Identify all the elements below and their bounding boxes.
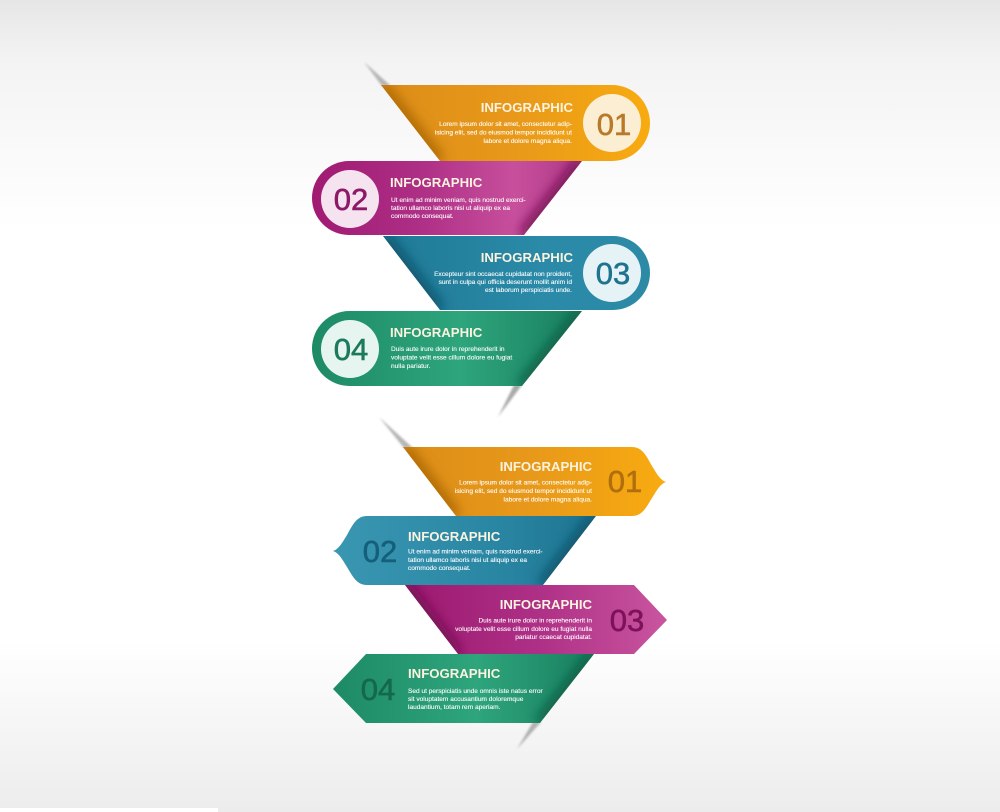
panel: arrow step 01 (403, 447, 666, 516)
panel: rounded step 04 (312, 311, 582, 386)
cut shadow: bottom of rounded group (498, 385, 522, 417)
body text 04: laudantium, totam rem aperiam. (408, 704, 501, 711)
number badge 02 (321, 170, 379, 228)
body text 04: voluptate velit esse cillum dolore eu fugiat (391, 354, 512, 362)
heading 04: INFOGRAPHIC (390, 325, 483, 340)
body text 02: tation ullamco laboris nisi ut aliquip ex ea (408, 557, 527, 564)
body text 03: Excepteur sint occaecat cupidatat non proident, (434, 271, 572, 278)
body text 03: Duis aute irure dolor in reprehenderit in (478, 618, 592, 624)
cut shadow: bottom of arrow group (517, 722, 541, 749)
body text 02: Ut enim ad minim veniam, quis nostrud exerci- (408, 548, 543, 556)
body text 03: voluptate velit esse cillum dolore eu fugiat nulla (455, 626, 592, 633)
body text 01: labore et dolore magna aliqua. (484, 138, 572, 145)
panel: rounded infographic group (312, 62, 650, 417)
body text 04: Sed ut perspiciatis unde omnis iste natus error (408, 688, 543, 695)
body text 03: sunt in culpa qui officia deserunt mollit anim id (439, 279, 572, 286)
body text 02: commodo consequat. (408, 565, 471, 572)
body text 01: Lorem ipsum dolor sit amet, consectetur adip- (439, 121, 572, 128)
number 01: 01 (597, 107, 631, 142)
body text 04: nulla pariatur. (391, 363, 430, 370)
panel: arrow step 03 (405, 585, 667, 654)
heading 03: INFOGRAPHIC (481, 250, 573, 265)
body text 04: Duis aute irure dolor in reprehenderit in (391, 346, 505, 353)
body text 01: isicing elit, sed do eiusmod tempor incididunt ut (435, 130, 572, 136)
number 03: 03 (596, 256, 630, 291)
panel: rounded step 01 (381, 85, 650, 161)
cut shadow: top of rounded group (364, 62, 391, 86)
heading 04: INFOGRAPHIC (408, 666, 501, 681)
body text 02: commodo consequat. (391, 213, 454, 220)
panel: rounded step 02 (312, 161, 582, 235)
heading 02: INFOGRAPHIC (408, 529, 501, 544)
heading 01: INFOGRAPHIC (500, 459, 592, 474)
number badge 01 (583, 94, 641, 152)
body text 01: isicing elit, sed do eiusmod tempor incididunt ut (455, 488, 592, 495)
panel: rounded step 03 (383, 236, 650, 310)
body text 02: Ut enim ad minim veniam, quis nostrud exerci- (391, 197, 526, 204)
number badge 03 (583, 244, 641, 302)
number badge 04 (321, 320, 379, 378)
number 03: 03 (610, 603, 644, 638)
panel: arrow step 02 (333, 516, 596, 585)
body text 04: sit voluptatem accusantium doloremque (408, 696, 524, 703)
body text 01: labore et dolore magna aliqua. (504, 496, 592, 504)
panel: arrow step 04 (333, 654, 594, 723)
number 04: 04 (361, 672, 395, 707)
heading 01: INFOGRAPHIC (481, 100, 573, 115)
number 02: 02 (363, 534, 397, 569)
body text 03: pariatur ccaecat cupidatat. (515, 634, 592, 641)
number 04: 04 (334, 332, 368, 367)
body text 01: Lorem ipsum dolor sit amet, consectetur adip- (459, 480, 592, 486)
body text 02: tation ullamco laboris nisi ut aliquip ex ea (391, 205, 510, 212)
heading 02: INFOGRAPHIC (390, 175, 483, 190)
panel: arrow infographic group (333, 417, 667, 749)
cut shadow: top of arrow group (379, 417, 413, 448)
number 01: 01 (608, 464, 642, 499)
body text 03: est laborum perspiciatis unde. (485, 287, 572, 294)
heading 03: INFOGRAPHIC (500, 597, 592, 612)
number 02: 02 (334, 182, 368, 217)
